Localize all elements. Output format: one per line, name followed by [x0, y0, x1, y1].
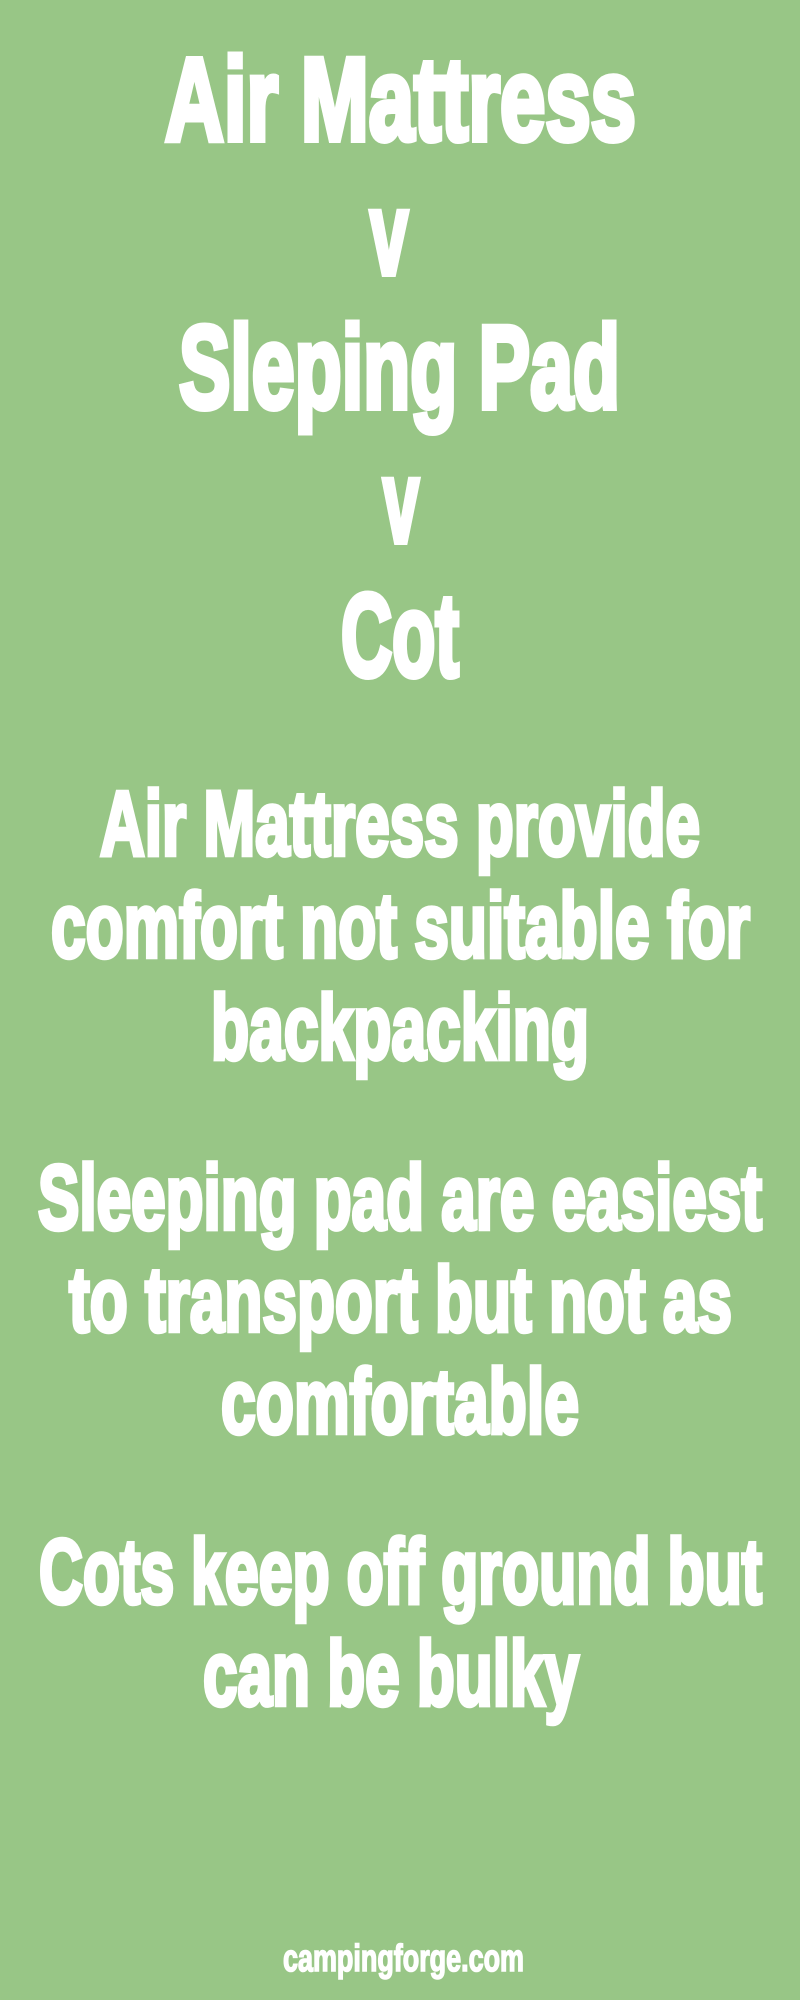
text block: air mattress summary: backpacking	[211, 977, 589, 1079]
title separator: v: v	[370, 168, 408, 300]
title	[165, 34, 636, 702]
text block: cots summary: can be bulky	[203, 1623, 579, 1725]
title separator: second v: v	[383, 436, 419, 568]
text block: sleeping pad summary	[38, 1147, 762, 1453]
text block: cots summary	[39, 1521, 762, 1725]
title line: Cot: Cot	[341, 570, 459, 702]
text block: sleeping pad summary: comfortable	[221, 1351, 579, 1453]
text block: air mattress summary	[51, 773, 750, 1079]
footer: website: campingforge.com	[283, 1938, 524, 1980]
